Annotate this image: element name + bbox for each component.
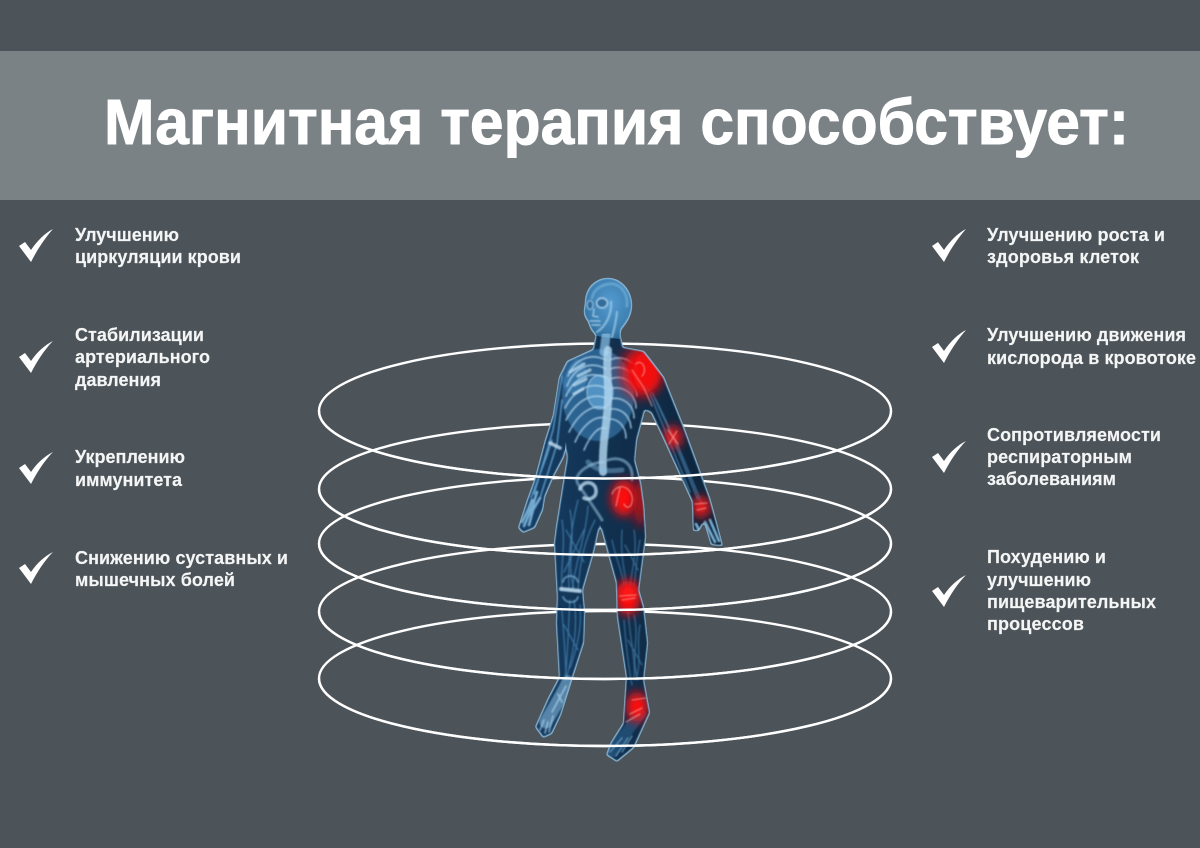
right benefits column (932, 225, 1196, 634)
benefit: weight loss and digestion: улучшению (987, 570, 1091, 590)
skull details (587, 284, 627, 337)
skull (584, 278, 632, 339)
ankle glow (626, 692, 648, 722)
body silhouette (518, 333, 723, 762)
jaw (597, 302, 617, 337)
benefit: arterial pressure: Стабилизации (75, 325, 204, 345)
eye sockets (596, 298, 608, 308)
hip joint (580, 483, 596, 499)
collarbone and upper-left rib lumps (570, 364, 590, 394)
benefit: respiratory resistance: заболеваниям (987, 469, 1116, 489)
left leg bones and vessels (562, 500, 595, 680)
benefit: weight loss and digestion: пищеварительных (987, 592, 1156, 612)
benefit: arterial pressure (19, 325, 210, 390)
benefit: oxygen movement: кислорода в кровотоке (987, 348, 1196, 368)
hip glow (611, 480, 637, 516)
ribs (565, 357, 641, 450)
human body x-ray figure (518, 278, 723, 762)
benefit: blood circulation (19, 225, 241, 267)
benefit: immunity: Укреплению (75, 447, 185, 467)
neck (604, 336, 606, 352)
left benefits column (19, 225, 288, 590)
benefit: oxygen movement (932, 325, 1196, 368)
title band (0, 51, 1200, 200)
shoulder glow (622, 348, 658, 396)
benefit: weight loss and digestion: Похудению и (987, 547, 1106, 567)
benefit: respiratory resistance (932, 425, 1161, 489)
right arm bones (646, 384, 702, 504)
benefit: immunity (19, 447, 185, 490)
red pain glows (611, 348, 710, 722)
benefit: cell growth: Улучшению роста и (987, 225, 1165, 245)
pelvis (577, 459, 632, 520)
magnetic rings behind the body (319, 344, 891, 746)
elbow glow (664, 426, 682, 448)
benefit: respiratory resistance: Сопротивляемости (987, 425, 1161, 445)
benefit: joint and muscle pain: мышечных болей (75, 570, 235, 590)
benefit: weight loss and digestion (932, 547, 1156, 634)
wrist glow (692, 497, 710, 517)
benefit: cell growth: здоровья клеток (987, 247, 1140, 267)
nose and teeth (590, 309, 600, 325)
knee glow (616, 581, 640, 615)
benefit: arterial pressure: артериального (75, 347, 210, 367)
benefit: cell growth (932, 225, 1165, 267)
benefit: joint and muscle pain (19, 548, 288, 590)
cranium shading (592, 284, 627, 306)
left arm bones (531, 376, 562, 498)
left shoulder glow (561, 358, 587, 394)
magnetic rings in front of the body (319, 411, 891, 746)
right leg bones and vessels (612, 530, 642, 685)
benefit: weight loss and digestion: процессов (987, 614, 1084, 634)
benefit: respiratory resistance: респираторным (987, 447, 1132, 467)
spine (603, 350, 608, 472)
benefit: oxygen movement: Улучшению движения (987, 325, 1186, 345)
title: Магнитная терапия способствует: (104, 86, 1129, 158)
skeleton and vessels (522, 336, 719, 756)
benefit: immunity: иммунитета (75, 470, 183, 490)
benefit: joint and muscle pain: Снижению суставных и (75, 548, 288, 568)
red joint details (612, 362, 707, 722)
chest glow (562, 349, 634, 441)
benefit: blood circulation: циркуляции крови (75, 247, 241, 267)
benefit: arterial pressure: давления (75, 370, 161, 390)
heart (587, 375, 613, 409)
benefit: blood circulation: Улучшению (75, 225, 179, 245)
